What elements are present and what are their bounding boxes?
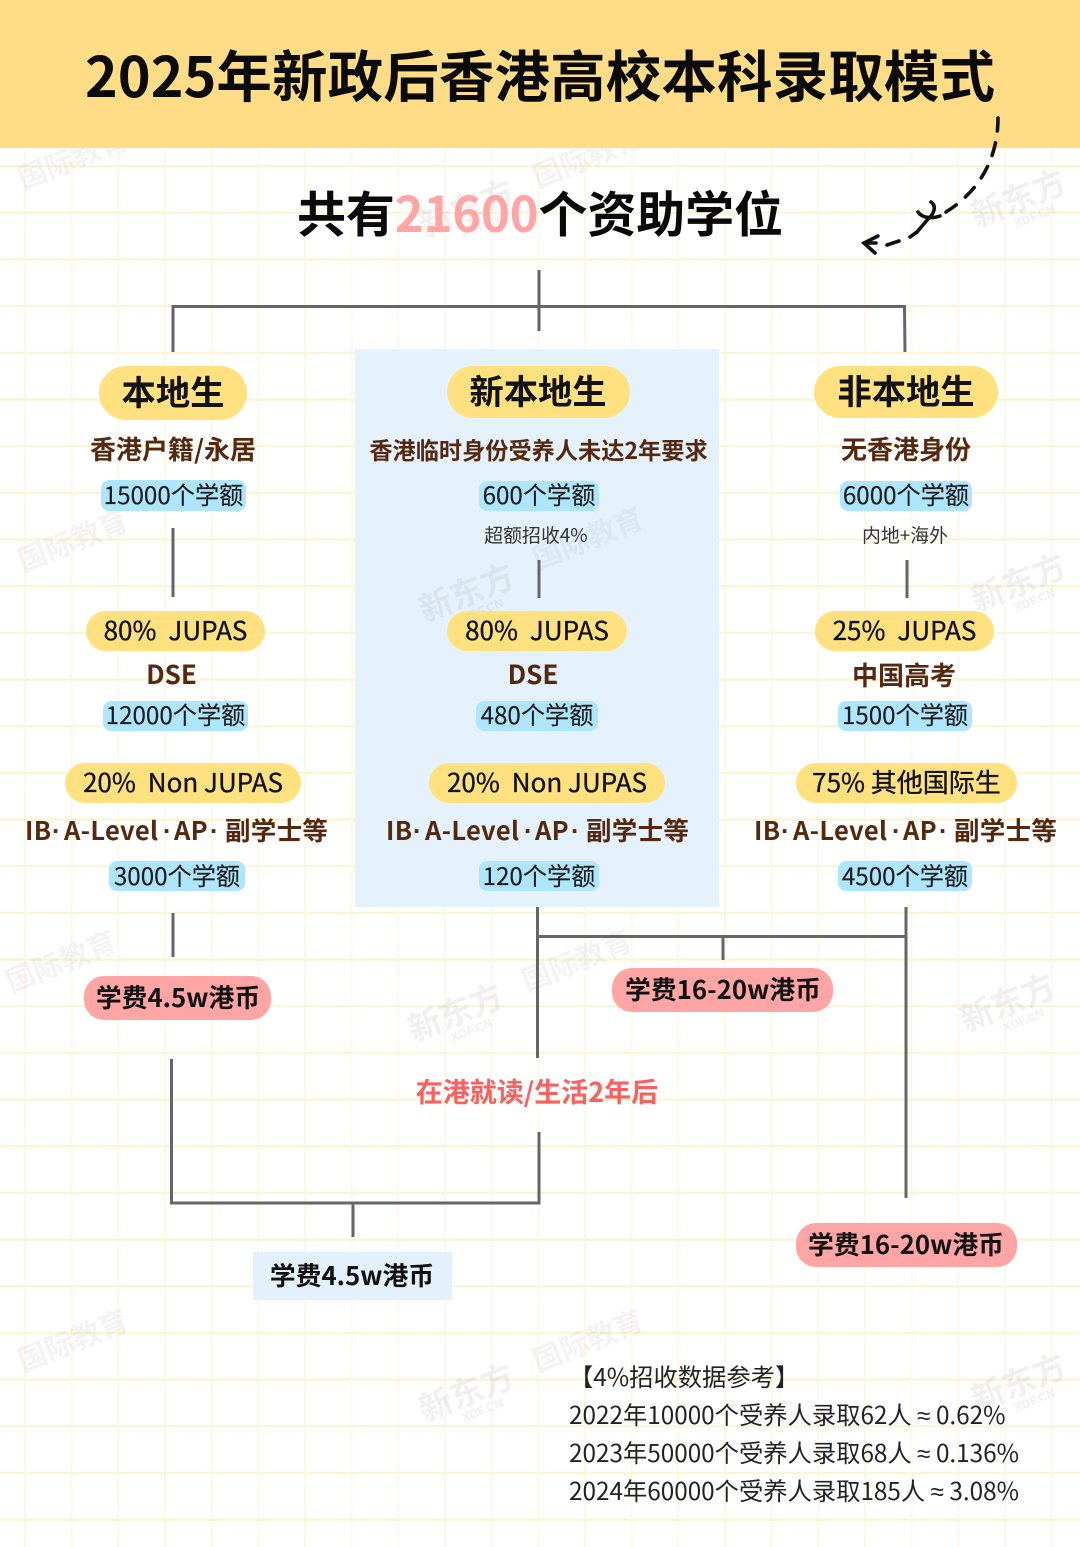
watermarks: 新东方 — [963, 156, 1073, 237]
connector — [906, 560, 908, 598]
pill: non-local tuition: 学费16-20w港币 — [808, 1225, 1004, 1262]
pill: 80% JUPAS: 80% JUPAS — [465, 611, 609, 648]
text: curricula: A-Level — [792, 811, 887, 848]
pill: local students: 本地生 — [122, 365, 224, 415]
text: curricula: IB — [386, 811, 412, 848]
watermarks: XDF.CN — [1012, 1386, 1057, 1415]
watermarks: 国际教育 — [526, 1298, 649, 1380]
pill: non-local students — [814, 364, 998, 418]
notes: 4% admission data — [569, 1358, 1019, 1507]
text: curricula: 副学士等 — [586, 811, 689, 848]
note: over-quota 4%: 超额招收4% — [484, 521, 588, 548]
text: curricula: AP — [534, 811, 569, 848]
tag: 4500 places: 4500个学额 — [842, 857, 968, 892]
watermarks: 新东方 — [400, 970, 510, 1051]
watermarks: 国际教育 — [0, 919, 122, 1001]
pill: local tuition: 学费4.5w港币 — [96, 978, 260, 1015]
text: curricula: · — [892, 818, 901, 846]
text: curricula: · — [163, 818, 172, 846]
tag: 1500 places: 1500个学额 — [842, 696, 968, 731]
text: curricula: · — [210, 818, 219, 846]
watermarks: XDF.CN — [460, 596, 505, 625]
pill: 20% Non JUPAS: 20% Non JUPAS — [83, 763, 283, 800]
text: curricula: AP — [902, 811, 937, 848]
watermarks: 国际教育 — [515, 918, 638, 1000]
tag: 600 places: 600个学额 — [483, 476, 595, 511]
tag: 15000 places: 15000个学额 — [104, 476, 243, 511]
text: non-local definition: 无香港身份 — [841, 430, 971, 467]
pill: non-local students: 非本地生 — [837, 364, 975, 414]
column: non-local students — [754, 364, 1057, 892]
header banner — [0, 0, 1080, 148]
notes: 4% admission data: 【4%招收数据参考】 — [569, 1358, 799, 1393]
watermarks: 新东方 — [963, 1340, 1073, 1421]
text: curricula: · — [413, 818, 422, 846]
pill: local students — [99, 365, 247, 420]
subtitle: total subsidised places: 共有21600个资助学位 — [297, 176, 783, 247]
tag: 120 places: 120个学额 — [483, 857, 595, 892]
icon: hand-drawn dashed arrow — [864, 118, 998, 253]
watermarks: XDF.CN — [460, 212, 505, 241]
watermarks: XDF.CN — [449, 1016, 494, 1045]
title: 2025年新政后香港高校本科录取模式 — [85, 33, 995, 113]
text: curricula: A-Level — [63, 811, 158, 848]
watermarks: XDF.CN — [1012, 202, 1057, 231]
text: curricula: · — [571, 818, 580, 846]
top tree connector — [173, 270, 905, 352]
text: local definition: 香港户籍/永居 — [90, 430, 256, 467]
notes: 4% admission data: 2022年10000个受养人录取62人 ≈ 0.62% — [569, 1396, 1006, 1431]
pill: new local students — [447, 364, 630, 418]
pill: 20% Non JUPAS: 20% Non JUPAS — [447, 763, 647, 800]
pill: 25% JUPAS: 25% JUPAS — [833, 611, 976, 648]
text: curricula: · — [52, 818, 61, 846]
watermarks: 新东方 — [411, 166, 521, 247]
pill: new local and non-local tuition: 学费16-20w港币 — [625, 970, 821, 1007]
text: curricula: A-Level — [424, 811, 519, 848]
watermarks: 新东方 — [952, 960, 1062, 1041]
text: curricula: 副学士等 — [954, 811, 1057, 848]
connector — [538, 560, 540, 598]
pill: new local students: 新本地生 — [469, 364, 607, 414]
tag: 6000 places: 6000个学额 — [843, 476, 969, 511]
watermarks: XDF.CN — [1001, 1006, 1046, 1035]
column: new local students — [369, 364, 708, 892]
tag: 12000 places: 12000个学额 — [106, 696, 245, 731]
text: curricula: · — [524, 818, 533, 846]
note: mainland and overseas: 内地+海外 — [862, 521, 948, 548]
watermarks: 国际教育 — [526, 114, 649, 196]
text: curricula: · — [939, 818, 948, 846]
watermarks: 国际教育 — [11, 1298, 134, 1380]
watermarks: XDF.CN — [1012, 586, 1057, 615]
text: curricula: 副学士等 — [225, 811, 328, 848]
tag: 480 places: 480个学额 — [481, 696, 593, 731]
tag: 3000 places: 3000个学额 — [114, 857, 240, 892]
text: curricula: AP — [173, 811, 208, 848]
text: curricula: IB — [25, 811, 51, 848]
watermarks: 国际教育 — [11, 116, 134, 198]
column: local students — [25, 365, 328, 892]
notes: 4% admission data: 2023年50000个受养人录取68人 ≈ 0.136% — [569, 1434, 1019, 1469]
text: DSE: DSE — [146, 655, 197, 692]
watermarks: 新东方 — [411, 550, 521, 631]
text: curricula: IB — [754, 811, 780, 848]
pill: 80% JUPAS: 80% JUPAS — [104, 611, 247, 648]
watermarks: 国际教育 — [526, 496, 649, 578]
text: new local definition: 香港临时身份受养人未达2年要求 — [369, 432, 708, 466]
notes: 4% admission data: 2024年60000个受养人录取185人 ≈ 3.08% — [569, 1472, 1019, 1507]
watermarks: 新东方 — [411, 1350, 521, 1431]
watermarks: XDF.CN — [460, 1396, 505, 1425]
text: gaokao: 中国高考 — [852, 656, 956, 693]
lower connectors — [172, 907, 906, 1237]
connector — [172, 528, 174, 597]
panel: new local students background — [355, 349, 719, 907]
pill: 75% other international: 75% 其他国际生 — [812, 763, 1001, 800]
watermarks: 新东方 — [963, 540, 1073, 621]
box: tuition after 2 years — [253, 1252, 452, 1300]
text: DSE: DSE — [508, 655, 558, 692]
watermarks: 国际教育 — [11, 498, 134, 580]
text: curricula: · — [781, 818, 790, 846]
box: tuition after 2 years: 学费4.5w港币 — [270, 1256, 434, 1293]
label: after 2 years in Hong Kong: 在港就读/生活2年后 — [416, 1071, 658, 1110]
